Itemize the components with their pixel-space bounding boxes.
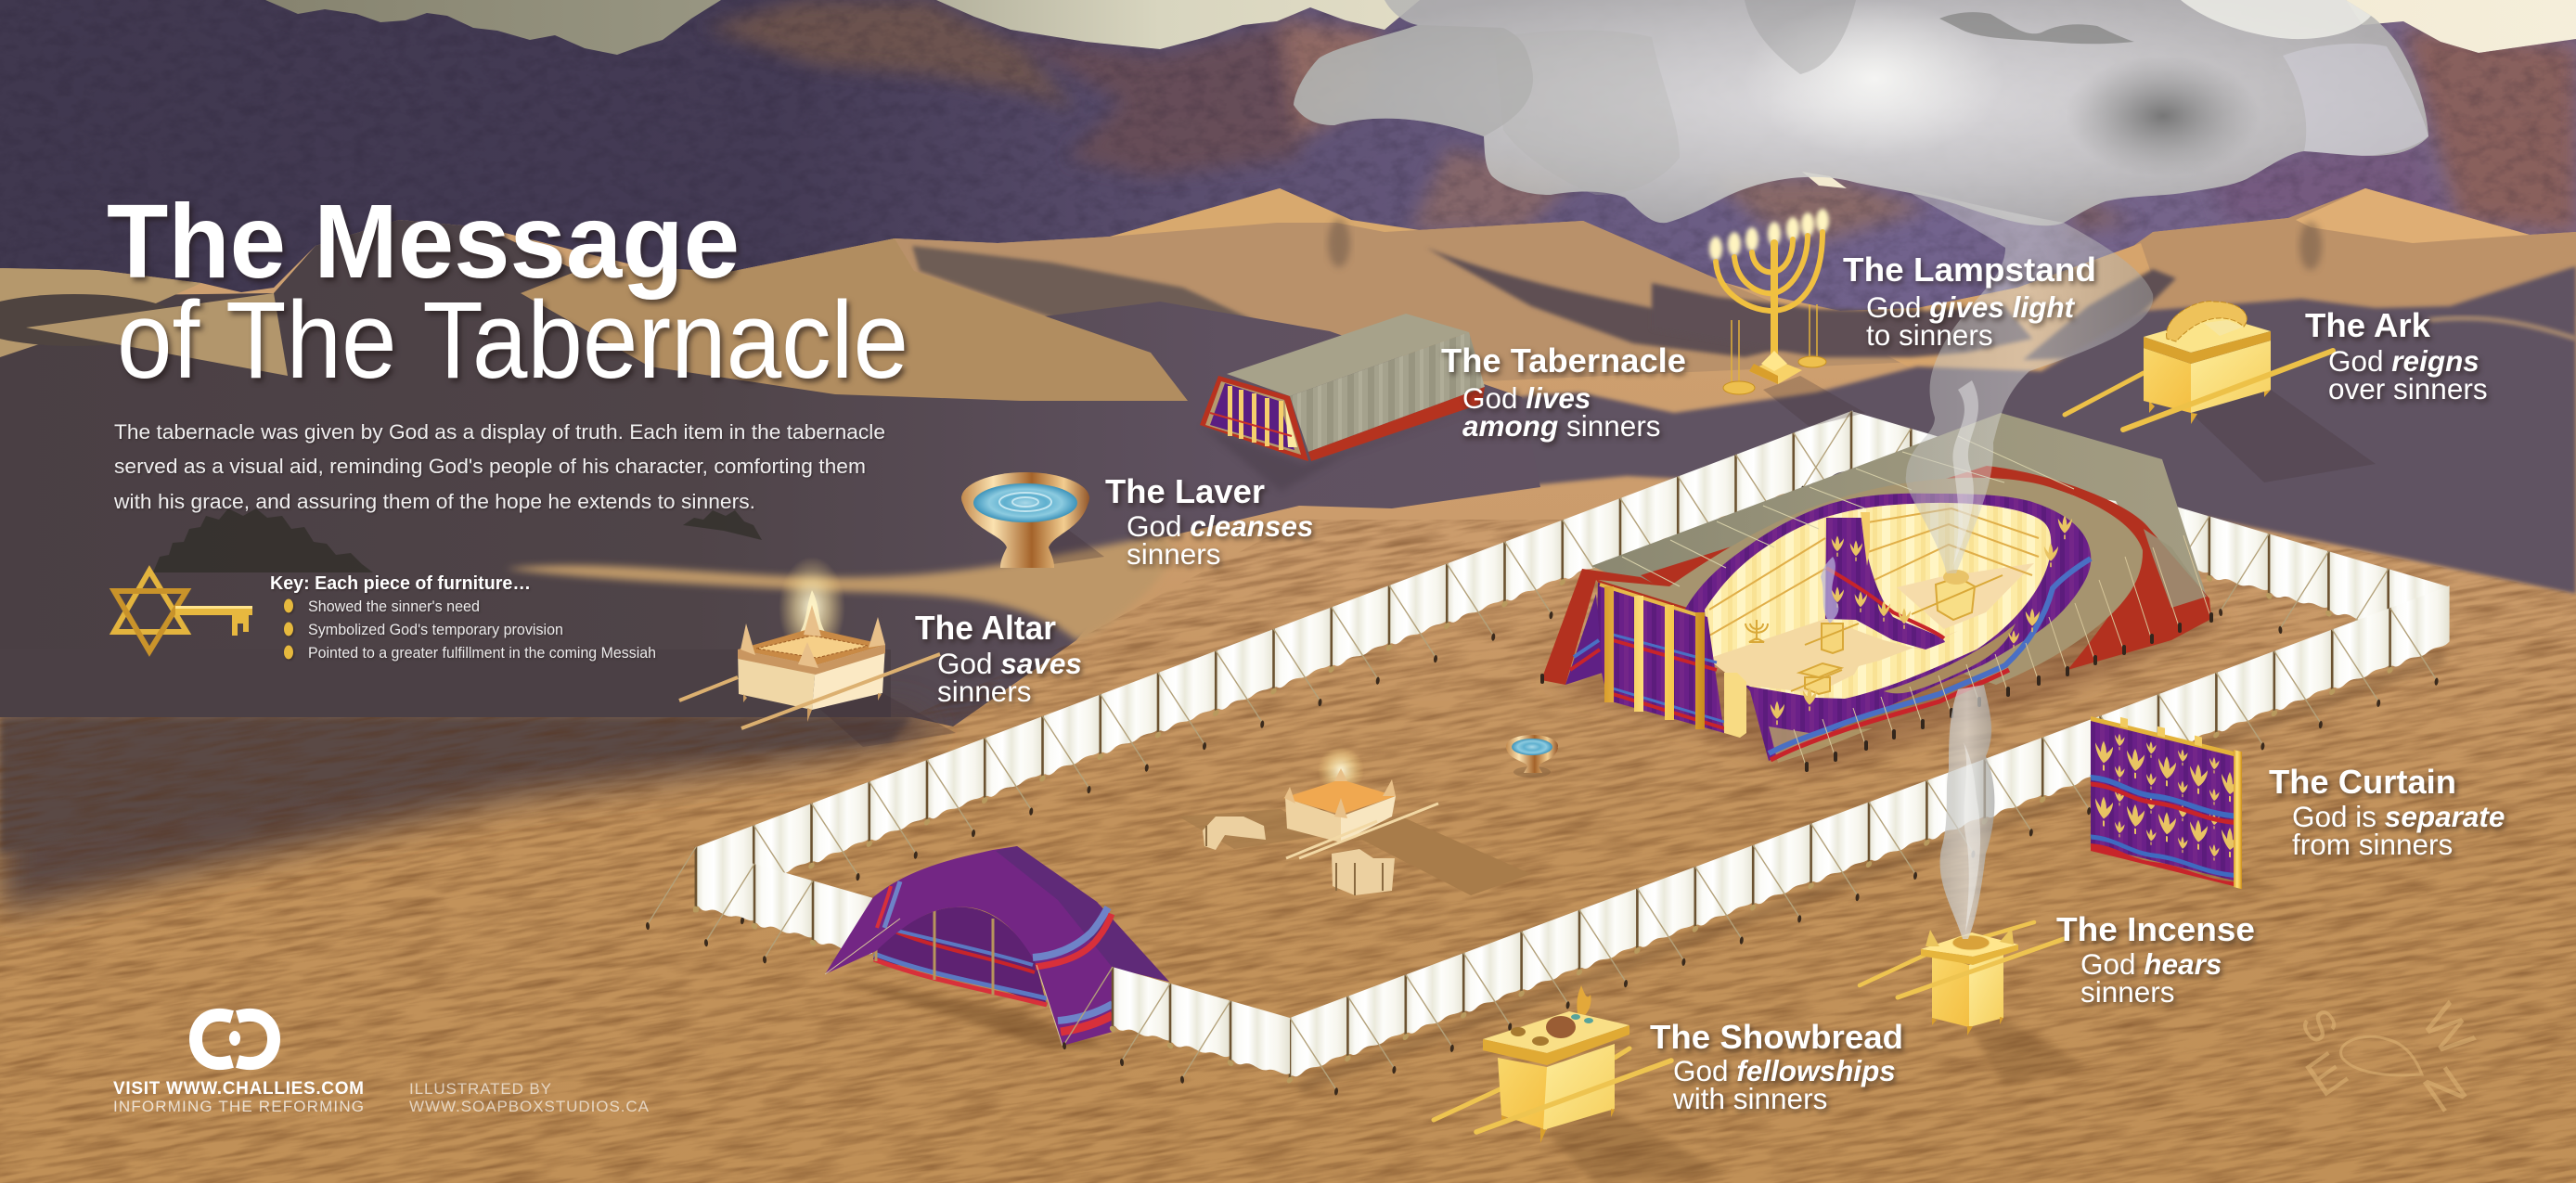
label: the tabernacle: among sinners [1462,409,1661,443]
roof seams [1622,436,2074,586]
interior [1705,503,2051,699]
label: the curtain: from sinners [2292,828,2453,861]
title [107,183,908,402]
sharp top of lower shadow [0,717,911,854]
lower sand shadow [0,710,937,914]
intro paragraph: served as a visual aid, reminding God's people of his character, comforting them [114,455,866,478]
intro paragraph: with his grace, and assuring them of the hope he extends to sinners. [113,490,755,513]
footer credits: ILLUSTRATED BY [409,1080,551,1098]
label: the lampstand: God gives light [1866,290,2076,324]
compass rose: N [2413,1054,2477,1124]
purple linen layer [1683,494,2091,761]
label: the showbread: God fellowships [1673,1054,1896,1087]
label: the ark: The Ark [2305,306,2431,344]
label: the curtain: The Curtain [2269,763,2456,801]
icon: star and key [114,571,252,651]
key legend: Showed the sinner's need [308,598,480,615]
far dunes [705,188,2576,390]
label: the ark: God reigns [2328,344,2479,378]
mini showbread [1791,663,1842,694]
dark left dunes [0,220,1540,727]
wall: front left section 1 [646,832,872,995]
icon: incense altar [1860,922,2088,1086]
bushes [153,508,762,572]
smoke: upper column [1900,186,2153,573]
icon: lampstand [1709,209,1865,427]
label: the tabernacle: God lives [1462,381,1591,415]
smoke: veil incense wisp [1821,557,1838,624]
curtain cherubim [1771,701,1784,725]
smoke: lower column [1940,685,1994,939]
lit dune slivers [0,238,1188,640]
smoke: cloud [1294,0,2428,225]
courtyard altar [1179,747,1531,895]
dune shadows [0,220,2576,727]
icon: altar [679,557,956,747]
compass rose: E [2295,1040,2357,1108]
label: the showbread [1650,1018,1903,1115]
icon: showbread table [1434,985,1726,1183]
label: the incense: God hears [2080,947,2222,981]
label: the lampstand: to sinners [1866,318,1993,352]
key legend: Key: Each piece of furniture… [270,573,531,594]
gate roof [825,846,1169,1046]
label: the altar [915,609,1082,708]
icon: ark [2065,302,2376,482]
key legend [270,573,656,662]
mini incense [1805,624,1859,653]
footer credits: INFORMING THE REFORMING [113,1098,364,1115]
label: the laver: The Laver [1105,472,1265,510]
sand ripple texture [0,520,2576,1183]
sky [0,0,2576,278]
label: the laver: sinners [1127,537,1221,571]
veil [1825,512,1945,649]
mountains [0,0,2576,311]
title: The Message [107,183,740,300]
label: the showbread: The Showbread [1650,1018,1903,1056]
interior floor [1707,619,1958,693]
tent ropes and pegs [1794,535,2211,768]
gate inner hanging [873,907,1047,1006]
curtain stripes [1769,559,2091,753]
footer credits: VISIT WWW.CHALLIES.COM [113,1079,364,1099]
label: the incense [2056,910,2255,1009]
intro paragraph: The tabernacle was given by God as a display of truth. Each item in the tabernacle [114,420,885,444]
tan hem under front curtain [1769,727,1873,763]
label: the showbread: with sinners [1672,1082,1827,1115]
red ram skin layer [1641,466,2211,670]
wall: back left [693,410,1853,943]
label: the laver: God cleanses [1127,509,1313,543]
label: the lampstand [1843,251,2096,352]
title: of The Tabernacle [117,279,908,402]
mini ark [1912,575,2003,620]
tan crescent gap [1884,624,2016,693]
label: the incense: sinners [2080,975,2175,1009]
label: the curtain: God is separate [2292,800,2505,833]
courtyard laver [1506,735,1558,778]
key legend: Pointed to a greater fulfillment in the coming Messiah [308,645,656,662]
compass rose: W [2410,993,2486,1067]
icon: curtain [2091,710,2283,891]
wall: back right [1801,396,2448,683]
wall: front left section 2 [1063,953,1290,1114]
label: the ark: over sinners [2328,372,2488,405]
icon: laver [961,472,1104,568]
small tabernacle illustration [1200,314,1503,492]
label: the tabernacle: The Tabernacle [1441,341,1686,379]
label: the laver [1105,472,1313,571]
footer credits [113,1079,650,1115]
label: the altar: sinners [937,675,1032,708]
label: the ark [2305,306,2488,405]
label: the altar: God saves [937,647,1082,680]
outer skin roof [1591,413,2207,612]
tabernacle ground shadow [1540,594,2227,775]
compass rose [2290,993,2486,1124]
main tabernacle cutaway [1540,413,2227,775]
wall ground shadow [1299,657,2444,1087]
wall: front right [1287,585,2450,1113]
label: the curtain [2269,763,2505,861]
gate tent [825,846,1169,1048]
logo [196,1015,274,1063]
label: the incense: The Incense [2056,910,2255,948]
distant sun patch [1802,172,1847,188]
intro paragraph [113,420,885,513]
key legend: Symbolized God's temporary provision [308,622,563,638]
footer credits: WWW.SOAPBOXSTUDIOS.CA [409,1098,650,1115]
label: the lampstand: The Lampstand [1843,251,2096,289]
red front frame [1541,569,1724,733]
compass rose: S [2290,1000,2348,1052]
mini lampstand [1745,620,1768,642]
label: the tabernacle [1441,341,1686,443]
upper dark panel re-edge [0,649,891,717]
tan layer [1598,478,2143,685]
front facade [1596,583,1724,733]
label: the altar: The Altar [915,609,1056,647]
hanging rods [1709,508,2039,636]
